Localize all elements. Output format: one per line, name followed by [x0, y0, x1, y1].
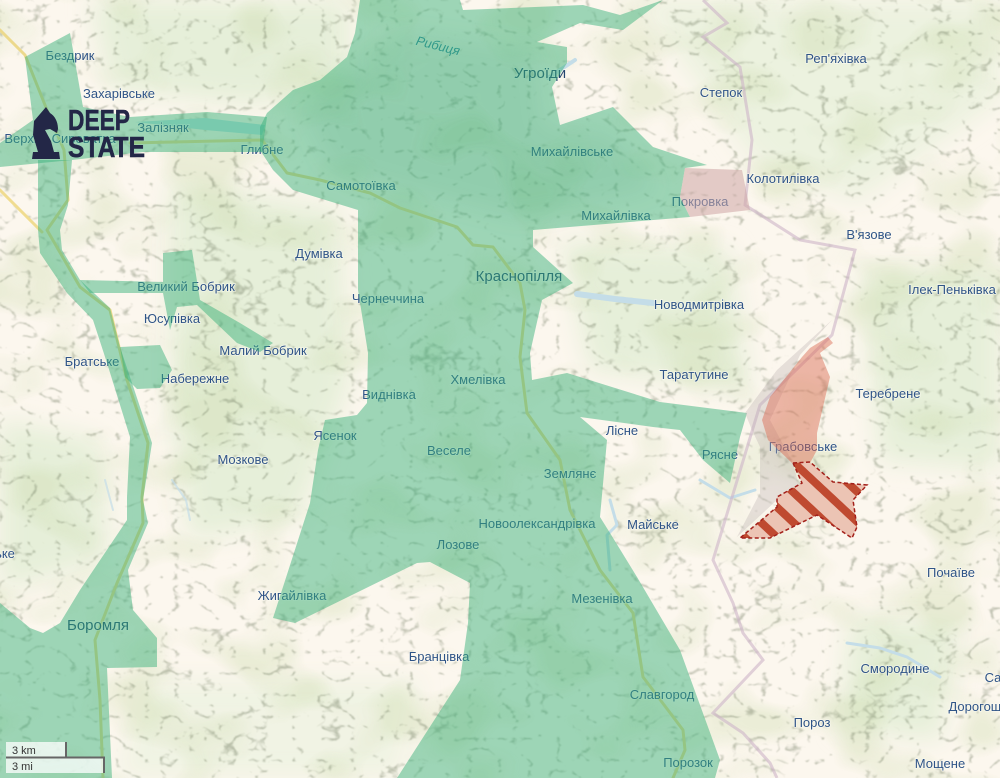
wordmark [68, 105, 145, 164]
settlement labels: Таратутине [660, 367, 728, 382]
settlement labels: Землянє [544, 466, 597, 481]
settlement labels: Майське [627, 517, 679, 532]
settlement labels: Угроїди [514, 65, 566, 82]
river: Mozkove [105, 480, 190, 520]
settlement labels: Мощене [915, 756, 965, 771]
settlement labels: Залізняк [137, 120, 189, 135]
settlement labels: Михайлівка [581, 208, 652, 223]
settlement labels: Мезенівка [571, 591, 633, 606]
green zone: western corridor [0, 160, 157, 778]
settlement labels: Верхня Сироватка [4, 131, 116, 146]
wordmark: DEEP [68, 105, 130, 137]
river: Maiske [607, 500, 617, 570]
settlement labels: Лозове [437, 537, 479, 552]
settlement labels: Михайлівське [531, 144, 613, 159]
settlement labels: Боромля [67, 617, 129, 634]
settlement labels: Бездрик [46, 48, 95, 63]
settlement labels: Юсупівка [144, 311, 201, 326]
settlement labels: Набережне [161, 371, 229, 386]
settlement labels: Ілек-Пеньківка [908, 282, 997, 297]
settlement labels: Ясенок [313, 428, 357, 443]
settlement labels: В'язове [846, 227, 892, 242]
settlement labels: Захарівське [83, 86, 155, 101]
settlement labels: Степок [700, 85, 743, 100]
contested grey zone: Pokrovka [680, 168, 750, 217]
settlement labels: Краснопілля [476, 268, 562, 285]
settlement labels: Малий Бобрик [219, 343, 307, 358]
settlement labels: Колотилівка [746, 171, 820, 186]
border line [703, 0, 855, 778]
settlement labels: Грабовське [769, 439, 837, 454]
settlement labels: Рибиця [415, 33, 462, 58]
green zone: Naberezhne bulge [120, 345, 172, 389]
reservoir: Zalizniak [135, 118, 265, 135]
pond: Uhroidy [548, 60, 575, 78]
settlement labels: Славгород [630, 687, 695, 702]
wordmark: STATE [68, 132, 145, 164]
settlement labels: Самотоївка [326, 178, 396, 193]
settlement labels: Почаїве [927, 565, 975, 580]
hatched zone: claimed territory [740, 462, 867, 538]
green zone: central area [260, 0, 747, 778]
settlement labels: Хмелівка [450, 372, 506, 387]
settlement labels: Лісне [606, 423, 638, 438]
scale bar [6, 742, 104, 773]
settlement labels: Новоолександрівка [479, 516, 596, 531]
3 mi scale: 3 mi [12, 761, 33, 773]
green zone: Zalizniak corridor [0, 33, 267, 167]
Deep State logo [32, 105, 145, 164]
settlement labels: Жигайлівка [258, 588, 327, 603]
settlement labels: Дорогощ [948, 699, 1000, 714]
settlement labels: Бранцівка [409, 649, 470, 664]
settlement labels: Реп'яхівка [805, 51, 867, 66]
river: near Smorodyne [847, 643, 940, 677]
darker forest shading over central zone [300, 30, 660, 220]
settlement labels: Мозкове [217, 452, 269, 467]
3 km scale: 3 km [12, 745, 36, 757]
settlement labels: Рясне [702, 447, 738, 462]
settlement labels: Веселе [427, 443, 471, 458]
contested grey zone: border strip [737, 320, 832, 537]
settlement labels: Пороз [794, 715, 830, 730]
settlement labels: Виднівка [362, 387, 417, 402]
settlement labels: Великий Бобрик [137, 279, 235, 294]
settlement labels: Порозок [663, 755, 713, 770]
roads [0, 30, 685, 778]
water bodies [105, 60, 940, 677]
settlement labels: Чернеччина [352, 291, 425, 306]
green zone: Velykyi Bobryk branch [80, 250, 273, 352]
settlement labels: Покровка [672, 194, 729, 209]
settlement labels: Теребрене [855, 386, 921, 401]
settlement labels: Думівка [295, 246, 343, 261]
red zone: Russian advance near Hrabovske [762, 337, 833, 463]
settlement labels: Глибне [240, 142, 284, 157]
settlement labels: Смородине [860, 661, 930, 676]
settlement labels: Братське [65, 354, 119, 369]
river: Novodmytrivka pond [577, 294, 653, 303]
river: Riasne [700, 480, 755, 498]
Ukrainian-held green zones [0, 0, 747, 778]
icon: chess knight [32, 107, 60, 159]
settlement labels: Новодмитрівка [654, 297, 745, 312]
